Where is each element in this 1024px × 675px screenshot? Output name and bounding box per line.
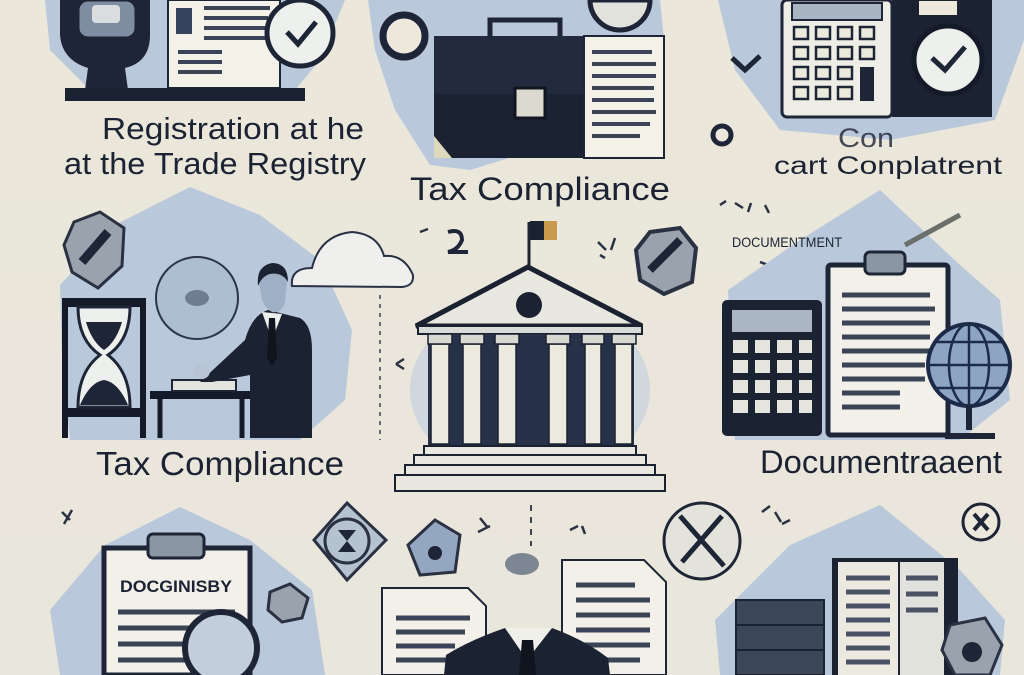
icon: flag [529, 221, 557, 272]
icon: businessman [194, 263, 312, 438]
icon: top seal [383, 15, 425, 57]
icon: grey ellipse [505, 553, 539, 575]
heading: documentraaent: Documentraaent [760, 444, 1002, 480]
icon: small glyph [448, 231, 468, 252]
icon: table and paper [150, 380, 254, 438]
heading: tax compliance top: Tax Compliance [410, 171, 670, 207]
icon: pen [905, 215, 960, 245]
pediment medallion [516, 292, 542, 318]
icon: checkmark [732, 56, 760, 70]
icon: clock [267, 0, 333, 66]
icon: bottom badge [942, 618, 1002, 675]
connector: bottom dashed line [530, 505, 532, 546]
icon: clipboard: DOCGINISBY [120, 577, 233, 596]
icon: registry stamp machine [60, 0, 150, 90]
icon: small seal [713, 126, 731, 144]
panel: bottom right books and server [715, 505, 1005, 675]
icon: magnifier [185, 612, 257, 675]
icon: hourglass [62, 298, 146, 438]
icon: registry document [168, 0, 280, 88]
icon: left document [382, 588, 486, 675]
heading: tax compliance left: Tax Compliance [96, 445, 344, 482]
heading: registration: Registration at he [102, 111, 364, 146]
icon: dial [156, 257, 238, 339]
label: document fragment: DOCUMENTMENT [732, 234, 842, 250]
heading: cart complaintent: cart Conplatrent [774, 152, 1002, 180]
icon: server stack [736, 600, 824, 675]
icon: executive [444, 628, 610, 675]
icon: octagon check [636, 228, 696, 294]
icon: top gauge [590, 0, 650, 30]
panel: registration at the trade registry [45, 0, 345, 101]
panel: tax compliance top [368, 0, 664, 170]
scattered marks [62, 201, 885, 534]
icon: cloud [292, 232, 413, 287]
icon: clipboard [828, 252, 948, 435]
icon: open book [832, 558, 958, 675]
heading: trade registry: at the Trade Registry [64, 146, 367, 181]
icon: x circle [963, 504, 999, 540]
icon: crossed badge [64, 212, 124, 288]
icon: polygon tag [408, 520, 460, 575]
icon: star badge [314, 503, 386, 580]
steps [395, 446, 665, 491]
columns [428, 334, 636, 446]
icon: globe [928, 324, 1010, 436]
pediment [416, 267, 642, 326]
icon: report document [584, 36, 664, 158]
connector: left dashed line [379, 295, 381, 440]
panel: bottom left document [50, 507, 325, 675]
icon: dark clock box [892, 0, 992, 117]
icon: right document [562, 560, 666, 675]
icon: small badge [268, 584, 308, 622]
panel: bottom center documents and executive [382, 560, 666, 675]
icon: calculator [782, 0, 892, 117]
icon: briefcase [434, 20, 584, 158]
panel: calculator top right [718, 0, 1024, 140]
panel: government building [395, 221, 665, 491]
icon: crossed circle [664, 503, 740, 579]
panel: hourglass and businessman [60, 187, 352, 440]
panel: documents and globe [722, 190, 1010, 440]
heading: compliance fragment: Con [838, 123, 894, 153]
icon: calculator [722, 300, 822, 436]
desk base [65, 88, 305, 101]
icon: clipboard [104, 534, 250, 675]
